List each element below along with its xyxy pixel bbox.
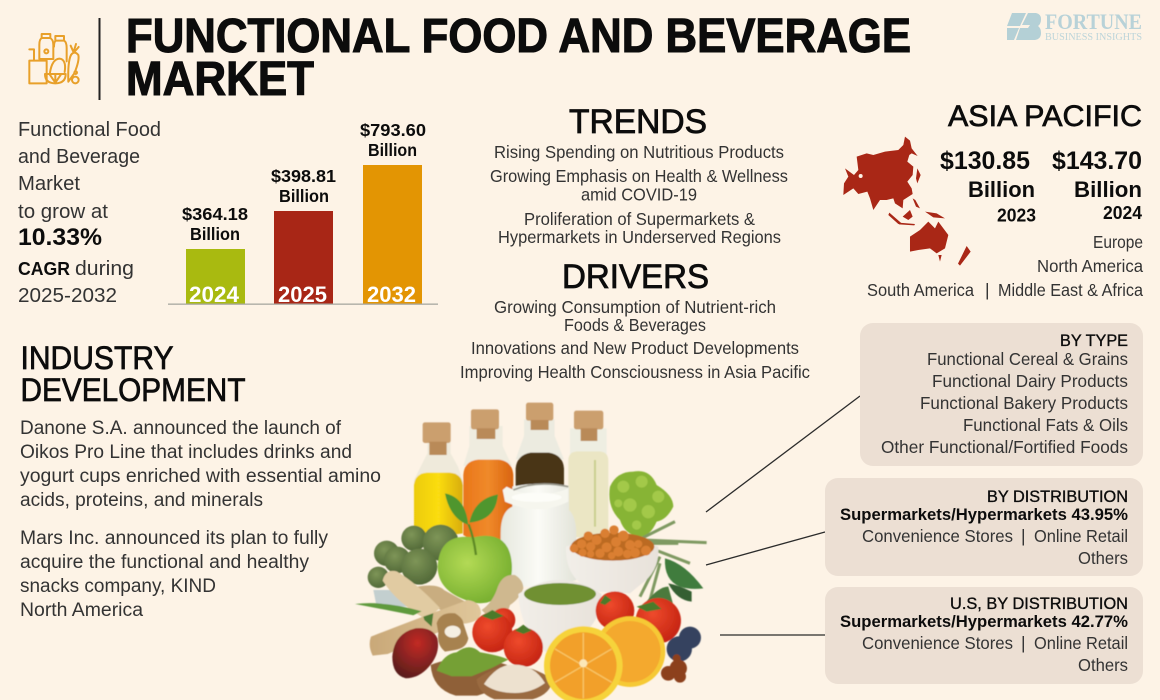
- logo: Fortune Business Insights: BUSINESS INSIGHTS: [1045, 31, 1142, 43]
- panel: Asia Pacific figures: |: [985, 280, 990, 300]
- broccoli: [368, 525, 459, 588]
- text block: market summary: and Beverage: [18, 146, 140, 168]
- bar: 2032: [360, 120, 426, 307]
- panel: by distribution: BY DISTRIBUTION: [987, 487, 1128, 506]
- panel: by distribution: Convenience Stores: [862, 526, 1013, 546]
- illustration: functional foods and bottles: [355, 403, 707, 700]
- panel: U.S. by distribution: Supermarkets/Hypermarkets 42.77%: [840, 612, 1128, 631]
- text block: market summary: to grow at: [18, 201, 108, 223]
- panel: trends: Proliferation of Supermarkets &: [524, 209, 755, 229]
- panel: by distribution: Supermarkets/Hypermarkets 43.95%: [840, 505, 1128, 524]
- bottle: yellow oil: [414, 422, 463, 537]
- panel: industry development: North America: [20, 600, 143, 621]
- panel: industry development: snacks company, KIND: [20, 576, 216, 597]
- bar: 2032: Billion: [368, 140, 417, 160]
- panel: drivers: Foods & Beverages: [564, 315, 706, 335]
- text block: market summary: 10.33%: [18, 224, 102, 251]
- title: [126, 10, 911, 106]
- bar: 2024: 2024: [189, 282, 239, 307]
- panel: by type: Functional Bakery Products: [920, 393, 1128, 413]
- bar: 2025: [271, 166, 336, 307]
- bowl: white powder: [477, 665, 553, 699]
- bottle: dark oil: [516, 403, 564, 488]
- text block: market summary: CAGR: [18, 259, 70, 279]
- icon: food and beverage line icon: [29, 34, 79, 83]
- text block: market summary: [18, 119, 161, 307]
- bar: 2024: Billion: [190, 224, 240, 244]
- logo: Fortune Business Insights: [1007, 9, 1142, 43]
- panel: Asia Pacific figures: $130.85: [940, 147, 1030, 175]
- panel: trends: Hypermarkets in Underserved Regions: [498, 227, 781, 247]
- bar: 2032: $793.60: [360, 120, 426, 140]
- lettuce: [609, 471, 673, 537]
- title: MARKET: [126, 53, 314, 106]
- panel: by distribution: Others: [1078, 548, 1128, 568]
- bar: 2025: $398.81: [271, 166, 336, 186]
- text block: market summary: 2025-2032: [18, 285, 117, 307]
- bowl: green powder: [518, 580, 602, 657]
- bowl: matcha: [431, 647, 508, 696]
- connector: illustration to by type: [706, 396, 860, 512]
- panel: by distribution: Online Retail: [1034, 526, 1128, 546]
- panel: industry development: INDUSTRY: [20, 340, 174, 376]
- panel: by distribution: [825, 478, 1143, 576]
- panel: trends: TRENDS: [569, 103, 707, 141]
- panel: industry development: acquire the functional and healthy: [20, 552, 309, 573]
- panel: Asia Pacific figures: North America: [1037, 256, 1143, 276]
- panel: trends: amid COVID-19: [581, 184, 697, 204]
- bar: 2024: $364.18: [182, 204, 248, 224]
- panel: by type: Functional Dairy Products: [932, 371, 1128, 391]
- panel: Asia Pacific figures: $143.70: [1052, 147, 1142, 175]
- panel: drivers: Improving Health Consciousness in Asia Pacific: [460, 362, 810, 382]
- panel: by type: [860, 323, 1143, 466]
- panel: by type: Functional Cereal & Grains: [927, 349, 1128, 369]
- panel: U.S. by distribution: [825, 587, 1143, 684]
- jar: milk: [501, 484, 576, 587]
- panel: industry development: Mars Inc. announced its plan to fully: [20, 528, 329, 549]
- panel: U.S. by distribution: |: [1021, 633, 1026, 653]
- panel: trends: [490, 103, 788, 247]
- orange slices: [544, 616, 665, 700]
- mushrooms: [423, 613, 468, 652]
- panel: by type: Other Functional/Fortified Foods: [881, 437, 1128, 457]
- panel: Asia Pacific figures: ASIA PACIFIC: [948, 100, 1142, 133]
- panel: Asia Pacific figures: Middle East & Africa: [998, 280, 1143, 300]
- bar chart: market size: [168, 120, 438, 307]
- panel: industry development: acids, proteins, and minerals: [20, 490, 263, 511]
- logo: Fortune Business Insights: FORTUNE: [1045, 9, 1142, 34]
- bottle: orange juice: [463, 409, 513, 545]
- panel: Asia Pacific figures: South America: [867, 280, 974, 300]
- panel: drivers: DRIVERS: [562, 258, 709, 296]
- panel: drivers: Innovations and New Product Developments: [471, 338, 799, 358]
- panel: trends: Rising Spending on Nutritious Products: [494, 142, 784, 162]
- divider: header vertical rule: [98, 18, 100, 100]
- panel: drivers: Growing Consumption of Nutrient-rich: [494, 297, 776, 317]
- text block: market summary: Functional Food: [18, 119, 161, 141]
- panel: U.S. by distribution: Online Retail: [1034, 633, 1128, 653]
- panel: Asia Pacific figures: Billion: [968, 177, 1035, 202]
- panel: Asia Pacific figures: Europe: [1093, 232, 1143, 252]
- bowl: chickpeas: [566, 525, 658, 593]
- roots: [370, 571, 523, 656]
- herbs: [640, 522, 707, 605]
- panel: Asia Pacific figures: Billion: [1074, 177, 1142, 202]
- panel: U.S. by distribution: Convenience Stores: [862, 633, 1013, 653]
- title: FUNCTIONAL FOOD AND BEVERAGE: [126, 10, 911, 63]
- panel: by type: BY TYPE: [1060, 331, 1128, 350]
- panel: industry development: Danone S.A. announced the launch of: [20, 418, 342, 439]
- dish under broccoli: [373, 590, 420, 607]
- text block: market summary: during: [75, 258, 134, 280]
- panel: Asia Pacific figures: [867, 100, 1143, 300]
- bottle: pale oil: [568, 411, 608, 537]
- connector: illustration to by distribution: [706, 532, 825, 565]
- tomatoes: [472, 591, 681, 667]
- plum: [392, 628, 438, 678]
- map: Asia Pacific: [843, 137, 971, 266]
- bar: 2024: [182, 204, 248, 307]
- bar: 2025: Billion: [279, 186, 329, 206]
- apple: [438, 493, 512, 603]
- panel: industry development: yogurt cups enriched with essential amino: [20, 466, 381, 487]
- panel: by type: Functional Fats & Oils: [963, 415, 1128, 435]
- blade of grass: [355, 603, 422, 615]
- panel: Asia Pacific figures: 2024: [1103, 203, 1142, 223]
- panel: industry development: DEVELOPMENT: [20, 372, 246, 408]
- panel: drivers: [460, 258, 810, 382]
- bar: 2025: 2025: [278, 282, 327, 307]
- blueberries: [667, 627, 701, 662]
- text block: market summary: Market: [18, 173, 80, 195]
- panel: U.S. by distribution: U.S, BY DISTRIBUTION: [950, 594, 1128, 613]
- panel: by distribution: |: [1021, 526, 1026, 546]
- panel: Asia Pacific figures: 2023: [997, 206, 1036, 226]
- panel: industry development: [20, 340, 381, 621]
- connector: illustration to U.S. distribution: [720, 634, 825, 636]
- panel: trends: Growing Emphasis on Health & Wellness: [490, 166, 788, 186]
- bar: 2032: 2032: [367, 282, 416, 307]
- panel: industry development: Oikos Pro Line that includes drinks and: [20, 442, 352, 463]
- spice pile: [661, 654, 687, 683]
- panel: U.S. by distribution: Others: [1078, 655, 1128, 675]
